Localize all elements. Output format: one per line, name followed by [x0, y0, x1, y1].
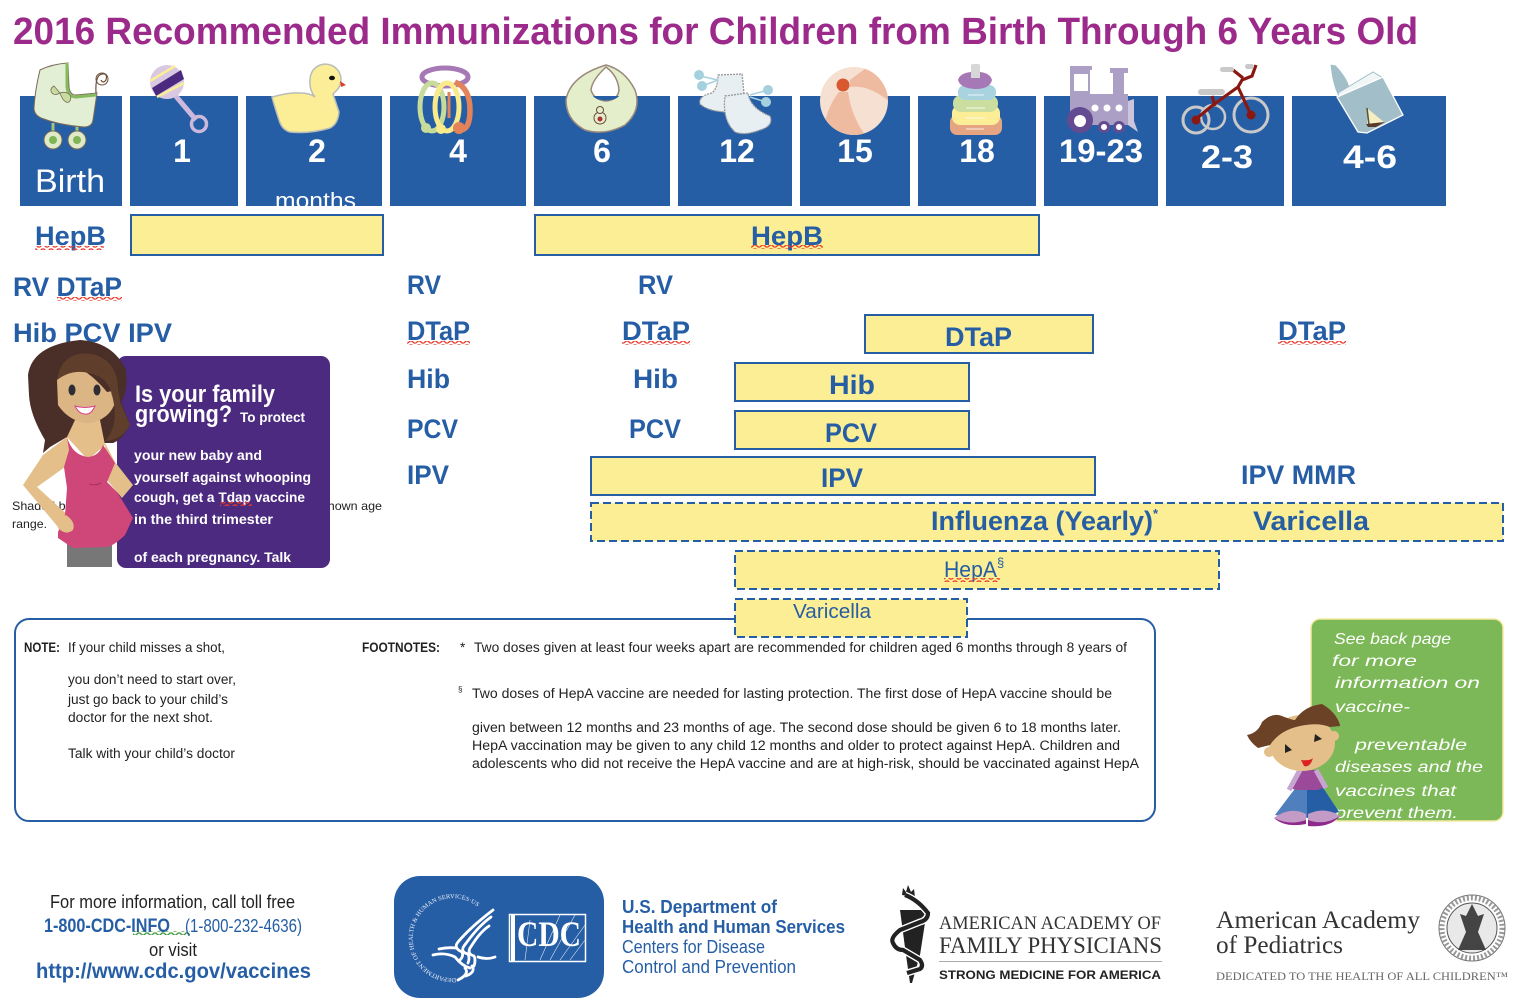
footnotes text: Two doses given at least four weeks apart are recommended for children aged 6 months through 8 years of [474, 640, 1127, 655]
header: 15 months [800, 96, 910, 206]
icon: rubber duck [272, 64, 346, 132]
row: HepA: HepA [944, 557, 997, 582]
header: 2 months [246, 96, 382, 213]
panel: see back page: vaccine- [1335, 699, 1410, 716]
row: Influenza and Varicella [591, 503, 1503, 541]
shaded box legend text: Shaded boxes indicate the vaccine can be given during shown age [12, 499, 382, 513]
footnotes text: HepA vaccination may be given to any child 12 months and older to protect against HepA. Children and [472, 738, 1120, 753]
HHS CDC wordmark: Control and Prevention [622, 957, 796, 977]
row: IPV MMR: IPV MMR [1241, 460, 1356, 490]
panel: is your family growing [117, 356, 330, 568]
note text: NOTE: [24, 640, 60, 655]
panel: is your family growing: yourself against whooping [134, 469, 311, 485]
panel: see back page: diseases and the [1335, 759, 1483, 776]
header: birth [20, 96, 122, 206]
contact info: (1-800-232-4636) [185, 916, 302, 936]
footnotes text [362, 640, 1139, 771]
note text: If your child misses a shot, [68, 640, 225, 655]
header: 2-3 years [1166, 96, 1284, 206]
panel: is your family growing: your new baby and [134, 447, 262, 463]
panel: see back page: preventable [1354, 737, 1467, 754]
contact info [36, 892, 311, 983]
panel: see back page [1311, 619, 1503, 822]
footnotes text: § [458, 685, 462, 694]
icon: booties [694, 70, 773, 134]
logo: American Academy of Family Physicians: FAMILY PHYSICIANS [939, 933, 1162, 958]
icon: bib [566, 65, 637, 132]
panel: is your family growing: of each pregnancy. Talk [134, 549, 291, 565]
row: RV: RV [638, 270, 673, 300]
header: 15 months: 15 [837, 133, 873, 169]
bar: HepB 1-2 months [131, 215, 383, 255]
panel: see back page: vaccines that [1335, 783, 1457, 800]
header: 4-6 years [1292, 96, 1446, 206]
logo: HHS and CDC [394, 876, 604, 998]
header: 4 months: 4 [449, 133, 467, 169]
row: PCV: PCV [825, 418, 877, 448]
icon: book [1330, 64, 1403, 133]
footnotes text: Two doses of HepA vaccine are needed for lasting protection. The first dose of HepA vaccine should be [472, 686, 1112, 701]
panel: is your family growing: growing? [135, 401, 232, 428]
HHS CDC wordmark: Centers for Disease [622, 937, 765, 957]
footnotes text: given between 12 months and 23 months of age. The second dose should be given 6 to 18 months later. [472, 720, 1121, 735]
row: Hib [407, 363, 969, 401]
contact info: 1-800-CDC-INFO [44, 916, 170, 937]
row: DTaP: DTaP [407, 316, 470, 346]
note text [24, 640, 236, 761]
footnotes text: * [460, 640, 466, 655]
row: Hib: Hib [633, 364, 678, 394]
header: 4 months [390, 96, 526, 206]
note text: doctor for the next shot. [68, 710, 213, 725]
row: IPV MMR [407, 457, 1356, 495]
contact info: http://www.cdc.gov/vaccines [36, 960, 311, 983]
row: Hib: Hib [407, 364, 450, 394]
logo: American Academy of Family Physicians: STRONG MEDICINE FOR AMERICA [939, 968, 1161, 982]
row: RV: RV [407, 270, 441, 300]
panel: see back page: prevent them. [1334, 805, 1458, 822]
icon: tricycle [1183, 64, 1268, 133]
icon: baby carriage [34, 63, 108, 149]
header: 1 month: 1 [173, 133, 191, 169]
HHS CDC wordmark [622, 897, 845, 977]
HHS CDC wordmark: Health and Human Services [622, 917, 845, 937]
icon: beach ball [820, 67, 890, 136]
header: birth: Birth [35, 163, 105, 199]
row: HepB [35, 215, 1039, 255]
logo: American Academy of Family Physicians [892, 885, 1162, 983]
row: DTaP: DTaP [1278, 316, 1346, 346]
note text: Talk with your child’s doctor [68, 746, 236, 761]
logo: American Academy of Pediatrics: of Pediatrics [1216, 932, 1343, 959]
row: Influenza and Varicella: Influenza (Yearly) [931, 506, 1153, 536]
row: PCV: PCV [407, 414, 458, 444]
panel: see back page: See back page [1334, 631, 1451, 648]
row: Varicella: Varicella [793, 601, 872, 623]
header: 2 months: months [275, 188, 356, 213]
footnote box [15, 619, 1155, 821]
logo: American Academy of Pediatrics: American Academy [1216, 907, 1421, 934]
note text: just go back to your child’s [67, 692, 228, 707]
header: 2-3 years: 2-3 [1201, 139, 1253, 175]
icon: teething rings [420, 68, 470, 134]
header: 18 months: 18 [959, 133, 995, 169]
header: 1 month [130, 96, 238, 206]
shaded box legend text [12, 499, 382, 531]
logo: HHS and CDC: CDC [517, 914, 581, 954]
row: Hib: Hib [829, 370, 875, 400]
row: IPV MMR: IPV [407, 460, 449, 490]
row: DTaP [407, 315, 1346, 353]
label: Hib PCV IPV: Hib PCV IPV [13, 318, 172, 348]
label: RV DTaP: RV DTaP [13, 272, 122, 302]
contact info: or visit [149, 940, 197, 960]
header: 19-23 months [1044, 96, 1158, 206]
illustration: girl [1247, 704, 1340, 826]
header: 2 months: 2 [308, 133, 326, 169]
footnotes text: FOOTNOTES: [362, 640, 440, 655]
icon: toy train [1067, 66, 1138, 133]
title: 2016 Recommended Immunizations for Children from Birth Through 6 Years Old [13, 11, 1418, 53]
logo: American Academy of Pediatrics: DEDICATED TO THE HEALTH OF ALL CHILDREN™ [1216, 971, 1508, 983]
header: 18 months [918, 96, 1036, 206]
panel: is your family growing: cough, get a Tdap vaccine [134, 489, 305, 505]
header: 12 months [678, 96, 792, 206]
panel: see back page: information on [1335, 675, 1480, 692]
row: Influenza and Varicella: * [1153, 506, 1159, 521]
row: HepA [735, 551, 1219, 589]
header: 12 months: 12 [719, 133, 755, 169]
note text: you don’t need to start over, [68, 672, 236, 687]
logo: American Academy of Family Physicians: AMERICAN ACADEMY OF [939, 913, 1161, 934]
logo: HHS and CDC: DEPARTMENT OF HEALTH & HUMAN SERVICES·USA [408, 894, 480, 982]
row: DTaP: DTaP [945, 322, 1012, 352]
HHS CDC wordmark: U.S. Department of [622, 897, 778, 917]
row: PCV: PCV [629, 414, 681, 444]
row: DTaP: DTaP [622, 316, 690, 346]
row: RV [407, 270, 673, 300]
icon: stacking rings [950, 64, 1002, 135]
row: Varicella [735, 599, 967, 637]
bar: HepB 6-18 months: HepB [751, 221, 823, 251]
row: IPV MMR: IPV [821, 463, 863, 493]
age header row [20, 96, 1446, 213]
contact info: For more information, call toll free [50, 892, 295, 912]
header: 19-23 months: 19-23 [1059, 133, 1143, 169]
footnotes text: adolescents who did not receive the HepA vaccine and are at high-risk, should be vaccinated against HepA [472, 756, 1139, 771]
row: PCV [407, 411, 969, 449]
label: HepB birth: HepB [35, 221, 106, 251]
header: 4-6 years: 4-6 [1343, 139, 1397, 175]
logo: American Academy of Pediatrics [1216, 895, 1508, 983]
shaded box legend text: range. [12, 517, 47, 531]
row: HepA: § [997, 555, 1004, 570]
header: 6 months: 6 [593, 133, 611, 169]
header: 6 months [534, 96, 670, 206]
panel: is your family growing: Is your family [135, 381, 276, 408]
panel: is your family growing: To protect [240, 409, 305, 425]
row: Influenza and Varicella: Varicella [1253, 506, 1370, 536]
illustration: pregnant woman [23, 340, 133, 567]
panel: is your family growing: in the third trimester [134, 511, 274, 527]
panel: see back page: for more [1332, 653, 1417, 670]
bar: HepB 6-18 months [535, 215, 1039, 255]
icon: rattle [150, 65, 206, 132]
